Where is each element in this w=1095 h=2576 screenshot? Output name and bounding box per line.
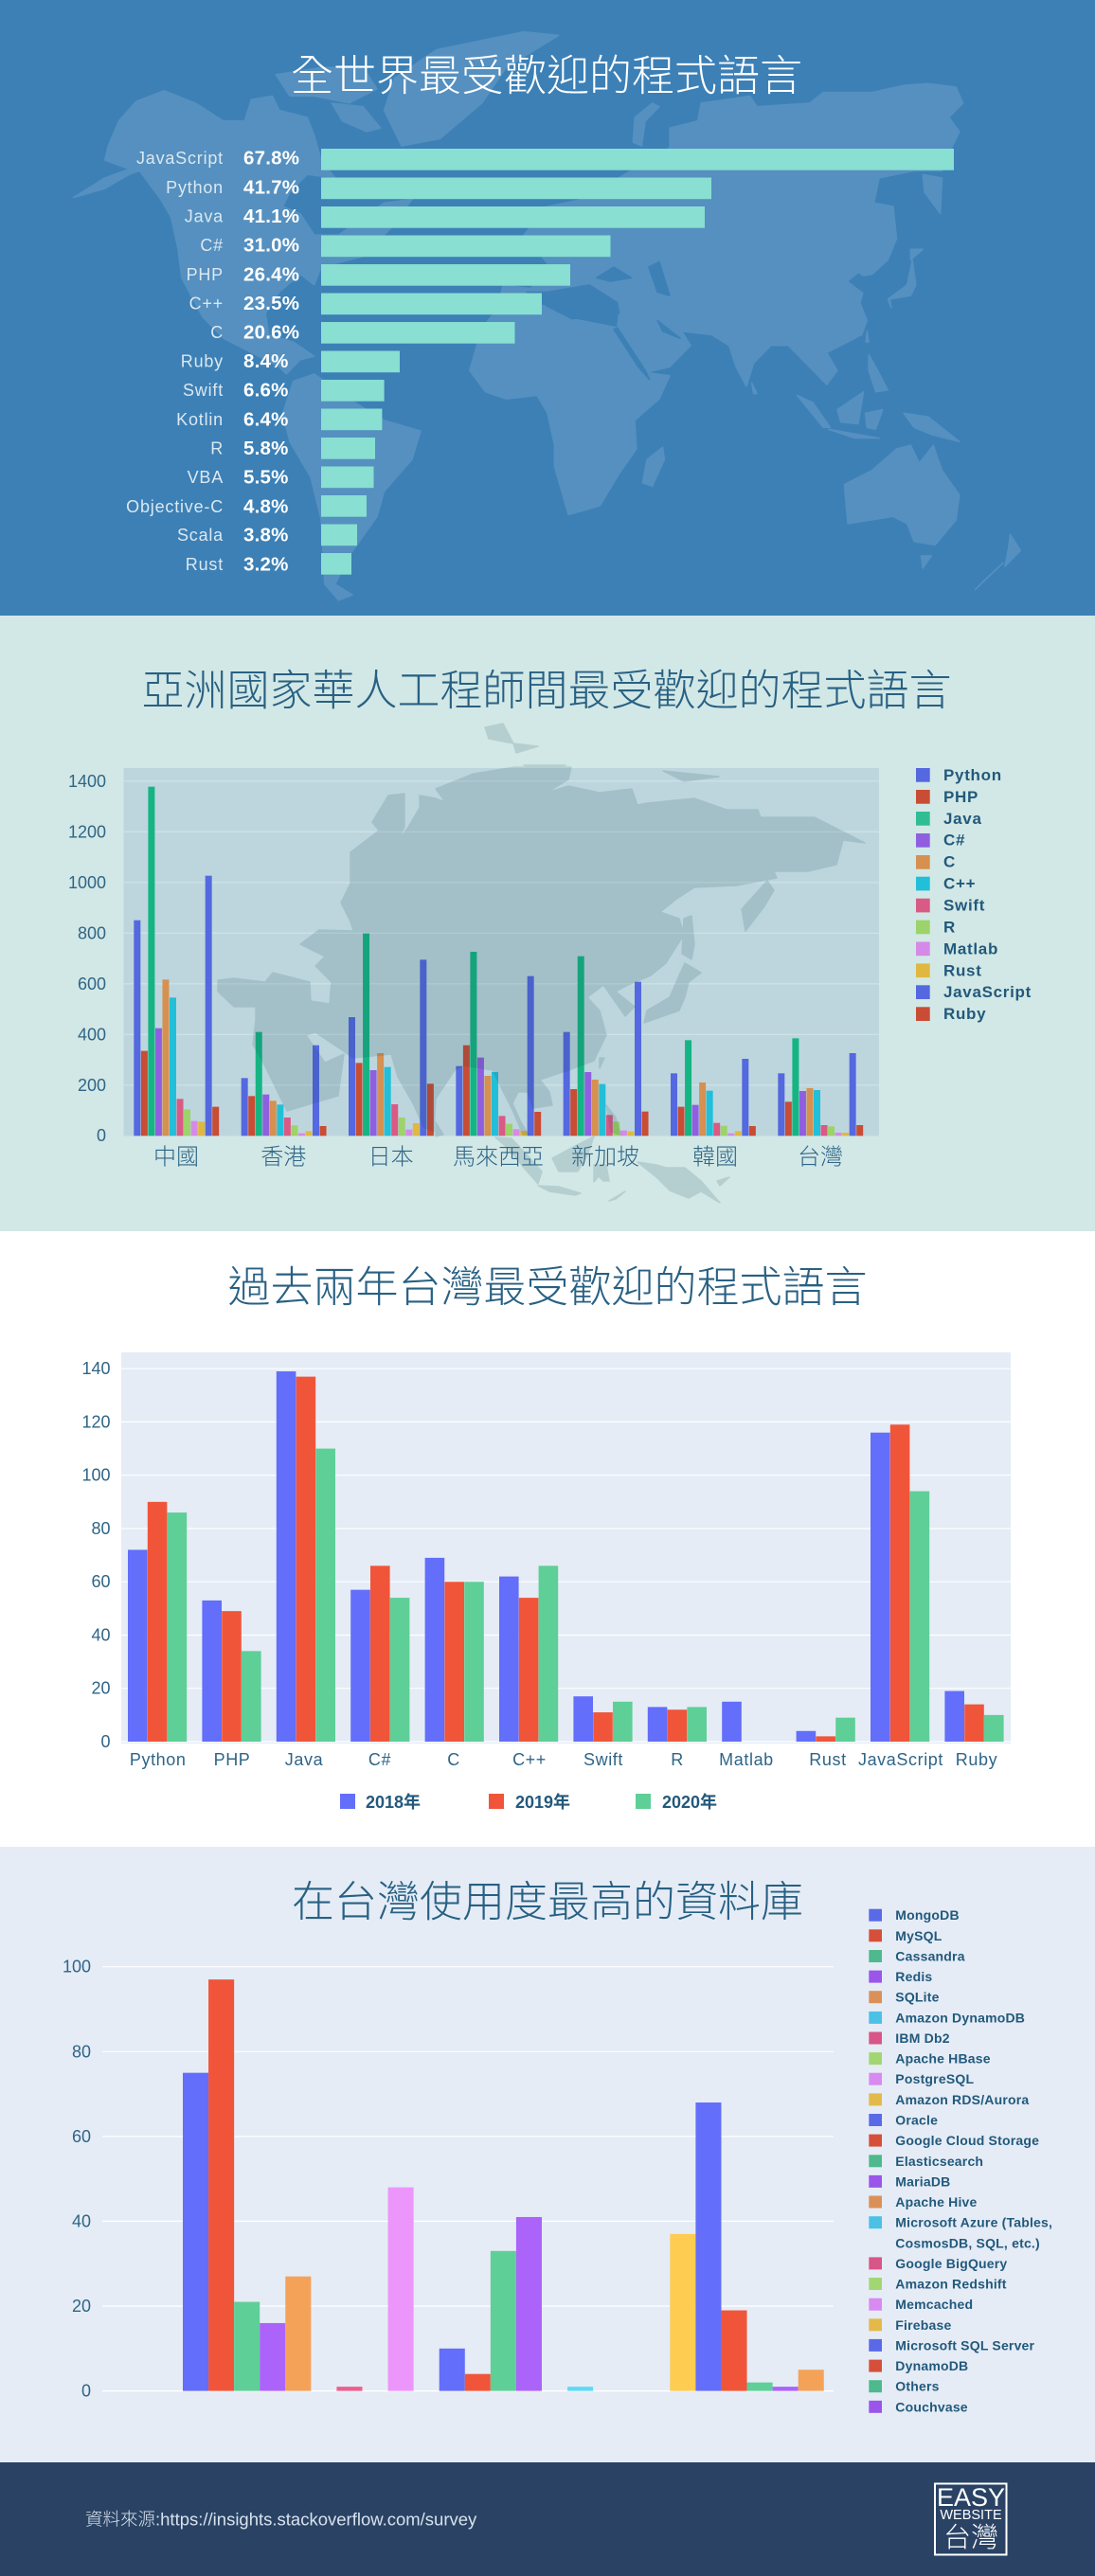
legend: Asian countries chart: JavaScript <box>943 983 1032 1001</box>
grouped bar chart: Asian countries <box>68 724 879 1203</box>
bar chart: languages worldwide: 3.2% <box>243 553 289 576</box>
panel: Asian countries <box>0 616 1095 1231</box>
bar chart: databases: 60 <box>72 2127 91 2146</box>
legend: Asian countries chart: PHP <box>943 788 978 806</box>
grouped bar chart: Taiwan languages by year: 120 <box>81 1412 110 1431</box>
bar chart: databases: 0 <box>81 2382 91 2401</box>
legend: Asian countries chart: Matlab <box>943 939 998 957</box>
legend: Asian countries chart: C <box>943 853 956 871</box>
grouped bar chart: Asian countries: 400 <box>78 1025 106 1044</box>
bar chart: languages worldwide: 6.4% <box>243 409 289 430</box>
bar chart: languages worldwide: 41.7% <box>243 176 299 199</box>
bar chart: languages worldwide: Scala <box>177 526 224 545</box>
grouped bar chart: Taiwan languages by year: 20 <box>91 1679 110 1698</box>
grouped bar chart: Taiwan languages by year: C# <box>368 1750 391 1769</box>
bar chart: languages worldwide: Python <box>166 178 224 197</box>
panel: world most popular languages <box>0 0 1095 616</box>
grouped bar chart: Asian countries: 新加坡 <box>571 1144 639 1171</box>
legend: databases <box>869 1907 1052 2414</box>
bar chart: languages worldwide: 41.1% <box>243 206 299 227</box>
bar chart: languages worldwide: 31.0% <box>243 235 299 256</box>
bar chart: databases <box>63 1958 834 2401</box>
legend: databases: Microsoft SQL Server <box>895 2337 1035 2352</box>
legend: databases: Apache Hive <box>895 2194 978 2209</box>
legend: databases: Apache HBase <box>895 2051 991 2066</box>
title: 亞洲國家華人工程師間最受歡迎的程式語言 <box>141 667 952 714</box>
panel: databases in Taiwan <box>0 1847 1095 2462</box>
grouped bar chart: Asian countries: 韓國 <box>692 1144 738 1171</box>
bar chart: languages worldwide: C <box>210 323 224 342</box>
panel: Taiwan past two years <box>0 1231 1095 1847</box>
bar chart: languages worldwide: PHP <box>187 265 224 284</box>
grouped bar chart: Asian countries: 馬來西亞 <box>453 1144 544 1171</box>
grouped bar chart: Taiwan languages by year: 80 <box>91 1519 110 1538</box>
grouped bar chart: Taiwan languages by year: C++ <box>512 1750 547 1769</box>
legend: Asian countries chart: R <box>943 918 956 936</box>
legend: databases: Cassandra <box>895 1949 965 1964</box>
logo: Easy Website Taiwan: EASY <box>937 2483 1005 2512</box>
bar chart: languages worldwide: R <box>210 439 224 458</box>
bar chart: languages worldwide: 8.4% <box>243 350 289 372</box>
legend: databases: Oracle <box>895 2112 938 2127</box>
bar chart: languages worldwide: C++ <box>189 294 224 313</box>
legend: databases: MariaDB <box>895 2174 951 2189</box>
title: 在台灣使用度最高的資料庫 <box>292 1877 803 1926</box>
grouped bar chart: Taiwan languages by year: 100 <box>81 1466 110 1485</box>
legend: Asian countries chart: C++ <box>943 875 976 893</box>
bar chart: languages worldwide: 23.5% <box>243 293 299 314</box>
legend: databases: Elasticsearch <box>895 2154 983 2169</box>
grouped bar chart: Taiwan languages by year: Python <box>130 1750 187 1769</box>
legend: databases: PostgreSQL <box>895 2071 974 2086</box>
grouped bar chart: Taiwan languages by year: Matlab <box>719 1750 774 1769</box>
legend: databases: CosmosDB, SQL, etc.) <box>895 2235 1040 2250</box>
bar chart: databases: 20 <box>72 2297 91 2316</box>
bar chart: languages worldwide: 67.8% <box>243 148 299 169</box>
grouped bar chart: Asian countries: 600 <box>78 975 106 993</box>
bar chart: languages worldwide: Swift <box>183 381 224 400</box>
legend: databases: MongoDB <box>895 1907 960 1923</box>
bar chart: languages worldwide: Objective-C <box>126 497 224 516</box>
grouped bar chart: Taiwan languages by year: 40 <box>91 1625 110 1644</box>
grouped bar chart: Asian countries: 中國 <box>153 1144 199 1171</box>
grouped bar chart: Asian countries: 200 <box>78 1076 106 1095</box>
bar chart: languages worldwide: 26.4% <box>243 263 299 286</box>
source text: 資料來源:https://insights.stackoverflow.com/survey <box>85 2510 477 2529</box>
grouped bar chart: Asian countries: 1000 <box>68 873 106 892</box>
legend: databases: Others <box>895 2379 940 2394</box>
grouped bar chart: Asian countries: 800 <box>78 923 106 942</box>
legend: databases: Amazon RDS/Aurora <box>895 2092 1029 2107</box>
legend: Asian countries chart: Java <box>943 810 982 828</box>
legend: Asian countries chart: Python <box>943 766 1002 784</box>
legend: databases: Redis <box>895 1969 932 1984</box>
legend: databases: IBM Db2 <box>895 2030 950 2046</box>
grouped bar chart: Taiwan languages by year: R <box>671 1750 684 1769</box>
bar chart: languages worldwide: Kotlin <box>176 410 224 429</box>
grouped bar chart: Asian countries: 1400 <box>68 772 106 791</box>
logo: Easy Website Taiwan: WEBSITE <box>940 2508 1002 2523</box>
bar chart: languages worldwide: 3.8% <box>243 525 289 546</box>
legend: years: 2019年 <box>515 1792 570 1812</box>
bar chart: languages worldwide: Ruby <box>181 352 224 371</box>
legend: years: 2018年 <box>366 1792 421 1812</box>
bar chart: languages worldwide <box>126 148 954 576</box>
grouped bar chart: Taiwan languages by year: PHP <box>214 1750 250 1769</box>
legend: Asian countries chart <box>916 766 1032 1023</box>
title: 過去兩年台灣最受歡迎的程式語言 <box>227 1263 868 1311</box>
bar chart: languages worldwide: Java <box>185 206 224 225</box>
bar chart: languages worldwide: 20.6% <box>243 322 299 343</box>
legend: databases: Firebase <box>895 2317 951 2333</box>
legend: Asian countries chart: Ruby <box>943 1005 986 1023</box>
world map background <box>73 32 1020 600</box>
legend: databases: Couchvase <box>895 2399 968 2414</box>
grouped bar chart: Taiwan languages by year: 60 <box>91 1572 110 1591</box>
bar chart: languages worldwide: 4.8% <box>243 496 289 517</box>
legend: databases: Memcached <box>895 2297 973 2312</box>
grouped bar chart: Taiwan languages by year <box>81 1352 1011 1769</box>
grouped bar chart: Asian countries: 台灣 <box>798 1144 843 1171</box>
legend: years <box>340 1792 717 1812</box>
grouped bar chart: Asian countries: 日本 <box>368 1144 414 1171</box>
legend: databases: Amazon DynamoDB <box>895 2010 1025 2025</box>
grouped bar chart: Taiwan languages by year: 0 <box>100 1732 110 1751</box>
legend: databases: DynamoDB <box>895 2358 968 2373</box>
logo: Easy Website Taiwan: 台灣 <box>943 2522 998 2553</box>
bar chart: languages worldwide: VBA <box>188 468 224 487</box>
legend: databases: Microsoft Azure (Tables, <box>895 2215 1052 2230</box>
bar chart: languages worldwide: Rust <box>186 555 224 574</box>
bar chart: databases: 100 <box>63 1958 91 1977</box>
grouped bar chart: Taiwan languages by year: 140 <box>81 1359 110 1378</box>
grouped bar chart: Taiwan languages by year: C <box>447 1750 460 1769</box>
grouped bar chart: Asian countries: 香港 <box>260 1144 306 1171</box>
legend: databases: Google BigQuery <box>895 2256 1007 2271</box>
legend: Asian countries chart: C# <box>943 832 965 850</box>
grouped bar chart: Taiwan languages by year: Ruby <box>956 1750 997 1769</box>
grouped bar chart: Taiwan languages by year: Swift <box>583 1750 623 1769</box>
footer <box>0 2462 1095 2576</box>
grouped bar chart: Asian countries: 0 <box>97 1126 106 1145</box>
Asia map overlay <box>218 724 865 1203</box>
title: 全世界最受歡迎的程式語言 <box>291 51 802 100</box>
legend: databases: SQLite <box>895 1990 940 2005</box>
grouped bar chart: Taiwan languages by year: Rust <box>809 1750 847 1769</box>
legend: databases: Google Cloud Storage <box>895 2133 1039 2148</box>
bar chart: languages worldwide: 5.5% <box>243 466 289 489</box>
bar chart: languages worldwide: 5.8% <box>243 438 289 459</box>
legend: Asian countries chart: Rust <box>943 961 982 979</box>
bar chart: databases: 40 <box>72 2211 91 2230</box>
legend: databases: Amazon Redshift <box>895 2277 1007 2292</box>
bar chart: languages worldwide: C# <box>200 236 224 255</box>
bar chart: languages worldwide: 6.6% <box>243 379 289 402</box>
legend: Asian countries chart: Swift <box>943 896 985 915</box>
grouped bar chart: Taiwan languages by year: JavaScript <box>858 1750 943 1769</box>
logo: Easy Website Taiwan <box>935 2483 1006 2555</box>
legend: years: 2020年 <box>662 1792 717 1812</box>
bar chart: languages worldwide: JavaScript <box>136 149 224 168</box>
grouped bar chart: Asian countries: 1200 <box>68 822 106 841</box>
legend: databases: MySQL <box>895 1928 942 1943</box>
bar chart: databases: 80 <box>72 2042 91 2061</box>
grouped bar chart: Taiwan languages by year: Java <box>285 1750 324 1769</box>
